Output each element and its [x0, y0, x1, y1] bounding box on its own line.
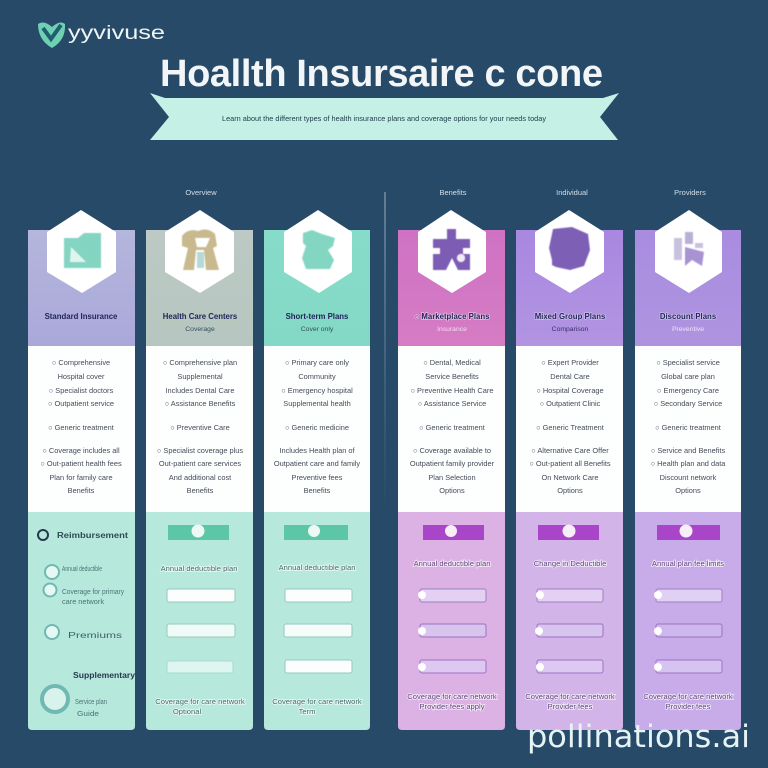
- feature list: Premiums: [68, 631, 122, 640]
- benefit list: Hospital cover: [58, 372, 105, 381]
- benefit list: ○ Out-patient all Benefits: [529, 459, 611, 468]
- feature bars: [643, 559, 733, 711]
- benefit list: ○ Generic medicine: [285, 423, 349, 432]
- benefit list: [529, 358, 611, 495]
- benefit list: [274, 358, 360, 495]
- benefit list: ○ Generic treatment: [419, 423, 485, 432]
- plan title: Preventive: [672, 326, 704, 333]
- benefit list: ○ Primary care only: [285, 358, 349, 367]
- feature list: Supplementary: [73, 671, 136, 680]
- plan title: [286, 312, 349, 333]
- benefit list: Plan Selection: [428, 473, 476, 482]
- benefit list: ○ Specialist doctors: [49, 386, 114, 395]
- watermark: pollinations.ai: [527, 719, 750, 755]
- benefit list: Benefits: [187, 486, 214, 495]
- feature bars: [407, 559, 497, 711]
- feature list: Service plan: [75, 699, 107, 706]
- feature bars: [155, 564, 245, 716]
- pricing badge: [657, 524, 720, 540]
- benefit list: ○ Emergency Care: [657, 386, 719, 395]
- benefit list: ○ Expert Provider: [541, 358, 599, 367]
- plan title: Coverage: [185, 326, 215, 333]
- feature bars: Provider fees: [548, 702, 593, 711]
- feature bars: Annual deductible plan: [279, 563, 355, 572]
- benefit list: Options: [557, 486, 583, 495]
- pricing badge: [423, 525, 484, 540]
- feature list: [38, 530, 136, 718]
- feature bars: Change in Deductible: [534, 559, 606, 568]
- icon: document tiles: [674, 232, 704, 266]
- icon: people: [433, 229, 470, 270]
- plan title: Insurance: [437, 326, 467, 333]
- benefit list: ○ Preventive Care: [170, 423, 230, 432]
- feature bars: Coverage for care network: [155, 697, 245, 706]
- benefit list: ○ Coverage includes all: [42, 446, 120, 455]
- plan title: ○ Marketplace Plans: [415, 312, 490, 321]
- benefit list: ○ Generic treatment: [655, 423, 721, 432]
- benefit list: Out-patient care services: [159, 459, 241, 468]
- benefit list: ○ Generic treatment: [48, 423, 114, 432]
- benefit list: ○ Coverage available to: [413, 446, 491, 455]
- plan title: [163, 312, 238, 333]
- benefit list: ○ Hospital Coverage: [536, 386, 604, 395]
- panel: column 2: [146, 210, 253, 730]
- benefit list: ○ Emergency hospital: [281, 386, 353, 395]
- benefit list: Includes Health plan of: [279, 446, 356, 455]
- benefit list: ○ Dental, Medical: [423, 358, 481, 367]
- benefit list: [651, 358, 726, 495]
- benefit list: ○ Outpatient service: [48, 399, 114, 408]
- benefit list: Global care plan: [661, 372, 715, 381]
- benefit list: Options: [439, 486, 465, 495]
- feature bars: Term: [299, 707, 315, 716]
- feature bars: Optional: [173, 707, 201, 716]
- benefit list: Preventive fees: [292, 473, 343, 482]
- feature bars: Coverage for care network: [272, 697, 362, 706]
- benefit list: Community: [298, 372, 336, 381]
- benefit list: Includes Dental Care: [165, 386, 235, 395]
- plan title: [535, 312, 606, 333]
- feature list: Coverage for primary: [62, 589, 124, 596]
- feature bars: Provider fees apply: [419, 702, 485, 711]
- benefit list: Discount network: [660, 473, 717, 482]
- pricing badge: [168, 524, 229, 540]
- plan title: Standard Insurance: [45, 312, 118, 321]
- icon: medical bag: [302, 230, 335, 269]
- feature bars: Provider fees: [666, 702, 711, 711]
- plan title: Short-term Plans: [286, 312, 349, 321]
- benefit list: ○ Health plan and data: [651, 459, 726, 468]
- plan title: Mixed Group Plans: [535, 312, 606, 321]
- benefit list: Plan for family care: [49, 473, 113, 482]
- benefit list: ○ Secondary Service: [654, 399, 722, 408]
- plan title: [660, 312, 717, 333]
- feature list: Annual deductible: [62, 566, 102, 573]
- banner ribbon: [150, 93, 619, 140]
- benefit list: ○ Generic Treatment: [536, 423, 604, 432]
- benefit list: ○ Preventive Health Care: [411, 386, 493, 395]
- column labels: Individual: [556, 188, 588, 197]
- benefit list: ○ Specialist coverage plus: [157, 446, 243, 455]
- benefit list: Supplemental health: [283, 399, 351, 408]
- icon: medical building: [182, 230, 219, 270]
- benefit list: ○ Outpatient Clinic: [540, 399, 601, 408]
- benefit list: [40, 358, 122, 495]
- feature bars: [525, 559, 615, 711]
- plan title: Discount Plans: [660, 312, 717, 321]
- feature bars: Coverage for care network: [407, 692, 497, 701]
- panel: column 5: [516, 210, 623, 730]
- icon: folder: [64, 233, 101, 268]
- benefit list: Supplemental: [177, 372, 223, 381]
- benefit list: ○ Service and Benefits: [651, 446, 725, 455]
- benefit list: [410, 358, 495, 495]
- benefit list: [157, 358, 243, 495]
- benefit list: ○ Assistance Service: [418, 399, 486, 408]
- plan title: [415, 312, 490, 333]
- pricing badge: [538, 524, 599, 540]
- pricing badge: [284, 525, 348, 540]
- panel: column 1: [28, 210, 136, 730]
- feature bars: Annual plan fee limits: [652, 559, 724, 568]
- title: Hoallth Insursaire c cone: [160, 53, 603, 95]
- panel: column 6: [635, 210, 741, 730]
- benefit list: Options: [675, 486, 701, 495]
- benefit list: ○ Alternative Care Offer: [531, 446, 609, 455]
- benefit list: ○ Comprehensive plan: [163, 358, 237, 367]
- feature bars: Annual deductible plan: [161, 564, 237, 573]
- column labels: Benefits: [439, 188, 467, 197]
- logo: yyvivuse: [68, 23, 165, 44]
- banner ribbon: Learn about the different types of health insurance plans and coverage options for your needs today: [222, 114, 546, 123]
- benefit list: Benefits: [304, 486, 331, 495]
- panel: column 3: [264, 210, 370, 730]
- feature bars: [272, 563, 362, 716]
- benefit list: ○ Specialist service: [656, 358, 720, 367]
- logo: [38, 23, 165, 48]
- feature bars: Coverage for care network: [643, 692, 733, 701]
- icon: speech bubble: [549, 227, 590, 270]
- column labels: [185, 188, 706, 197]
- feature list: care network: [62, 599, 105, 606]
- plan title: Comparison: [552, 326, 589, 333]
- benefit list: Outpatient family provider: [410, 459, 495, 468]
- benefit list: Benefits: [68, 486, 95, 495]
- plan title: Cover only: [301, 326, 334, 333]
- feature bars: Annual deductible plan: [414, 559, 490, 568]
- column labels: Overview: [185, 188, 217, 197]
- feature list: Reimbursement: [57, 531, 128, 540]
- benefit list: ○ Out-patient health fees: [40, 459, 122, 468]
- benefit list: ○ Assistance Benefits: [165, 399, 236, 408]
- plan title: Health Care Centers: [163, 312, 238, 321]
- column labels: Providers: [674, 188, 706, 197]
- benefit list: Outpatient care and family: [274, 459, 360, 468]
- panel: column 4: [398, 210, 505, 730]
- feature list: Guide: [77, 711, 99, 718]
- benefit list: On Network Care: [541, 473, 599, 482]
- benefit list: Service Benefits: [425, 372, 479, 381]
- benefit list: ○ Comprehensive: [52, 358, 110, 367]
- benefit list: And additional cost: [169, 473, 231, 482]
- benefit list: Dental Care: [550, 372, 590, 381]
- feature bars: Coverage for care network: [525, 692, 615, 701]
